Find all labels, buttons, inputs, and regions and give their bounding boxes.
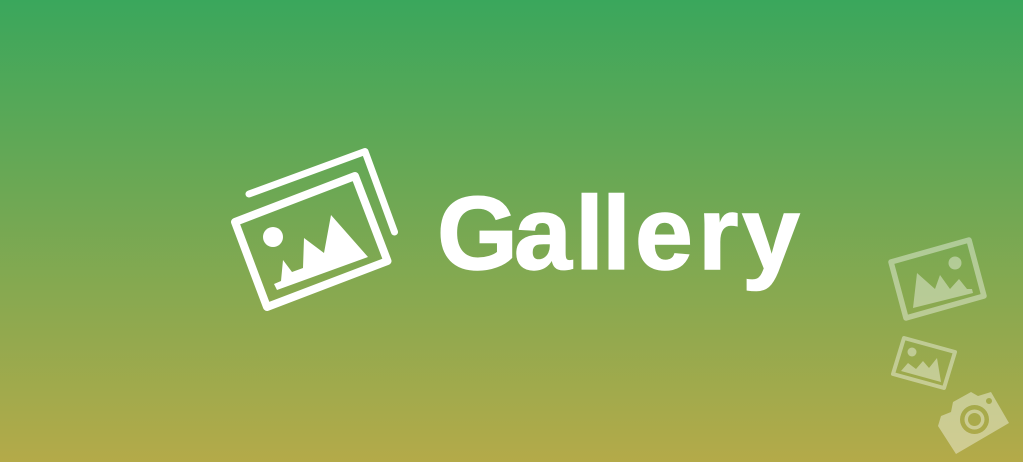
icon: faded camera (938, 392, 1009, 454)
sun (263, 227, 283, 247)
sun (948, 256, 962, 270)
icon: faded photo small (893, 338, 955, 388)
photo frame (893, 338, 955, 388)
back photo outline (249, 152, 394, 232)
mountains (901, 358, 941, 382)
mountains (274, 215, 368, 290)
front photo frame (235, 176, 388, 307)
title: Gallery (437, 176, 800, 292)
photo frame (891, 240, 984, 318)
icon: main gallery photos (235, 152, 394, 307)
mountains (913, 273, 973, 308)
icon: faded photo large (891, 240, 984, 318)
sun (908, 348, 916, 356)
